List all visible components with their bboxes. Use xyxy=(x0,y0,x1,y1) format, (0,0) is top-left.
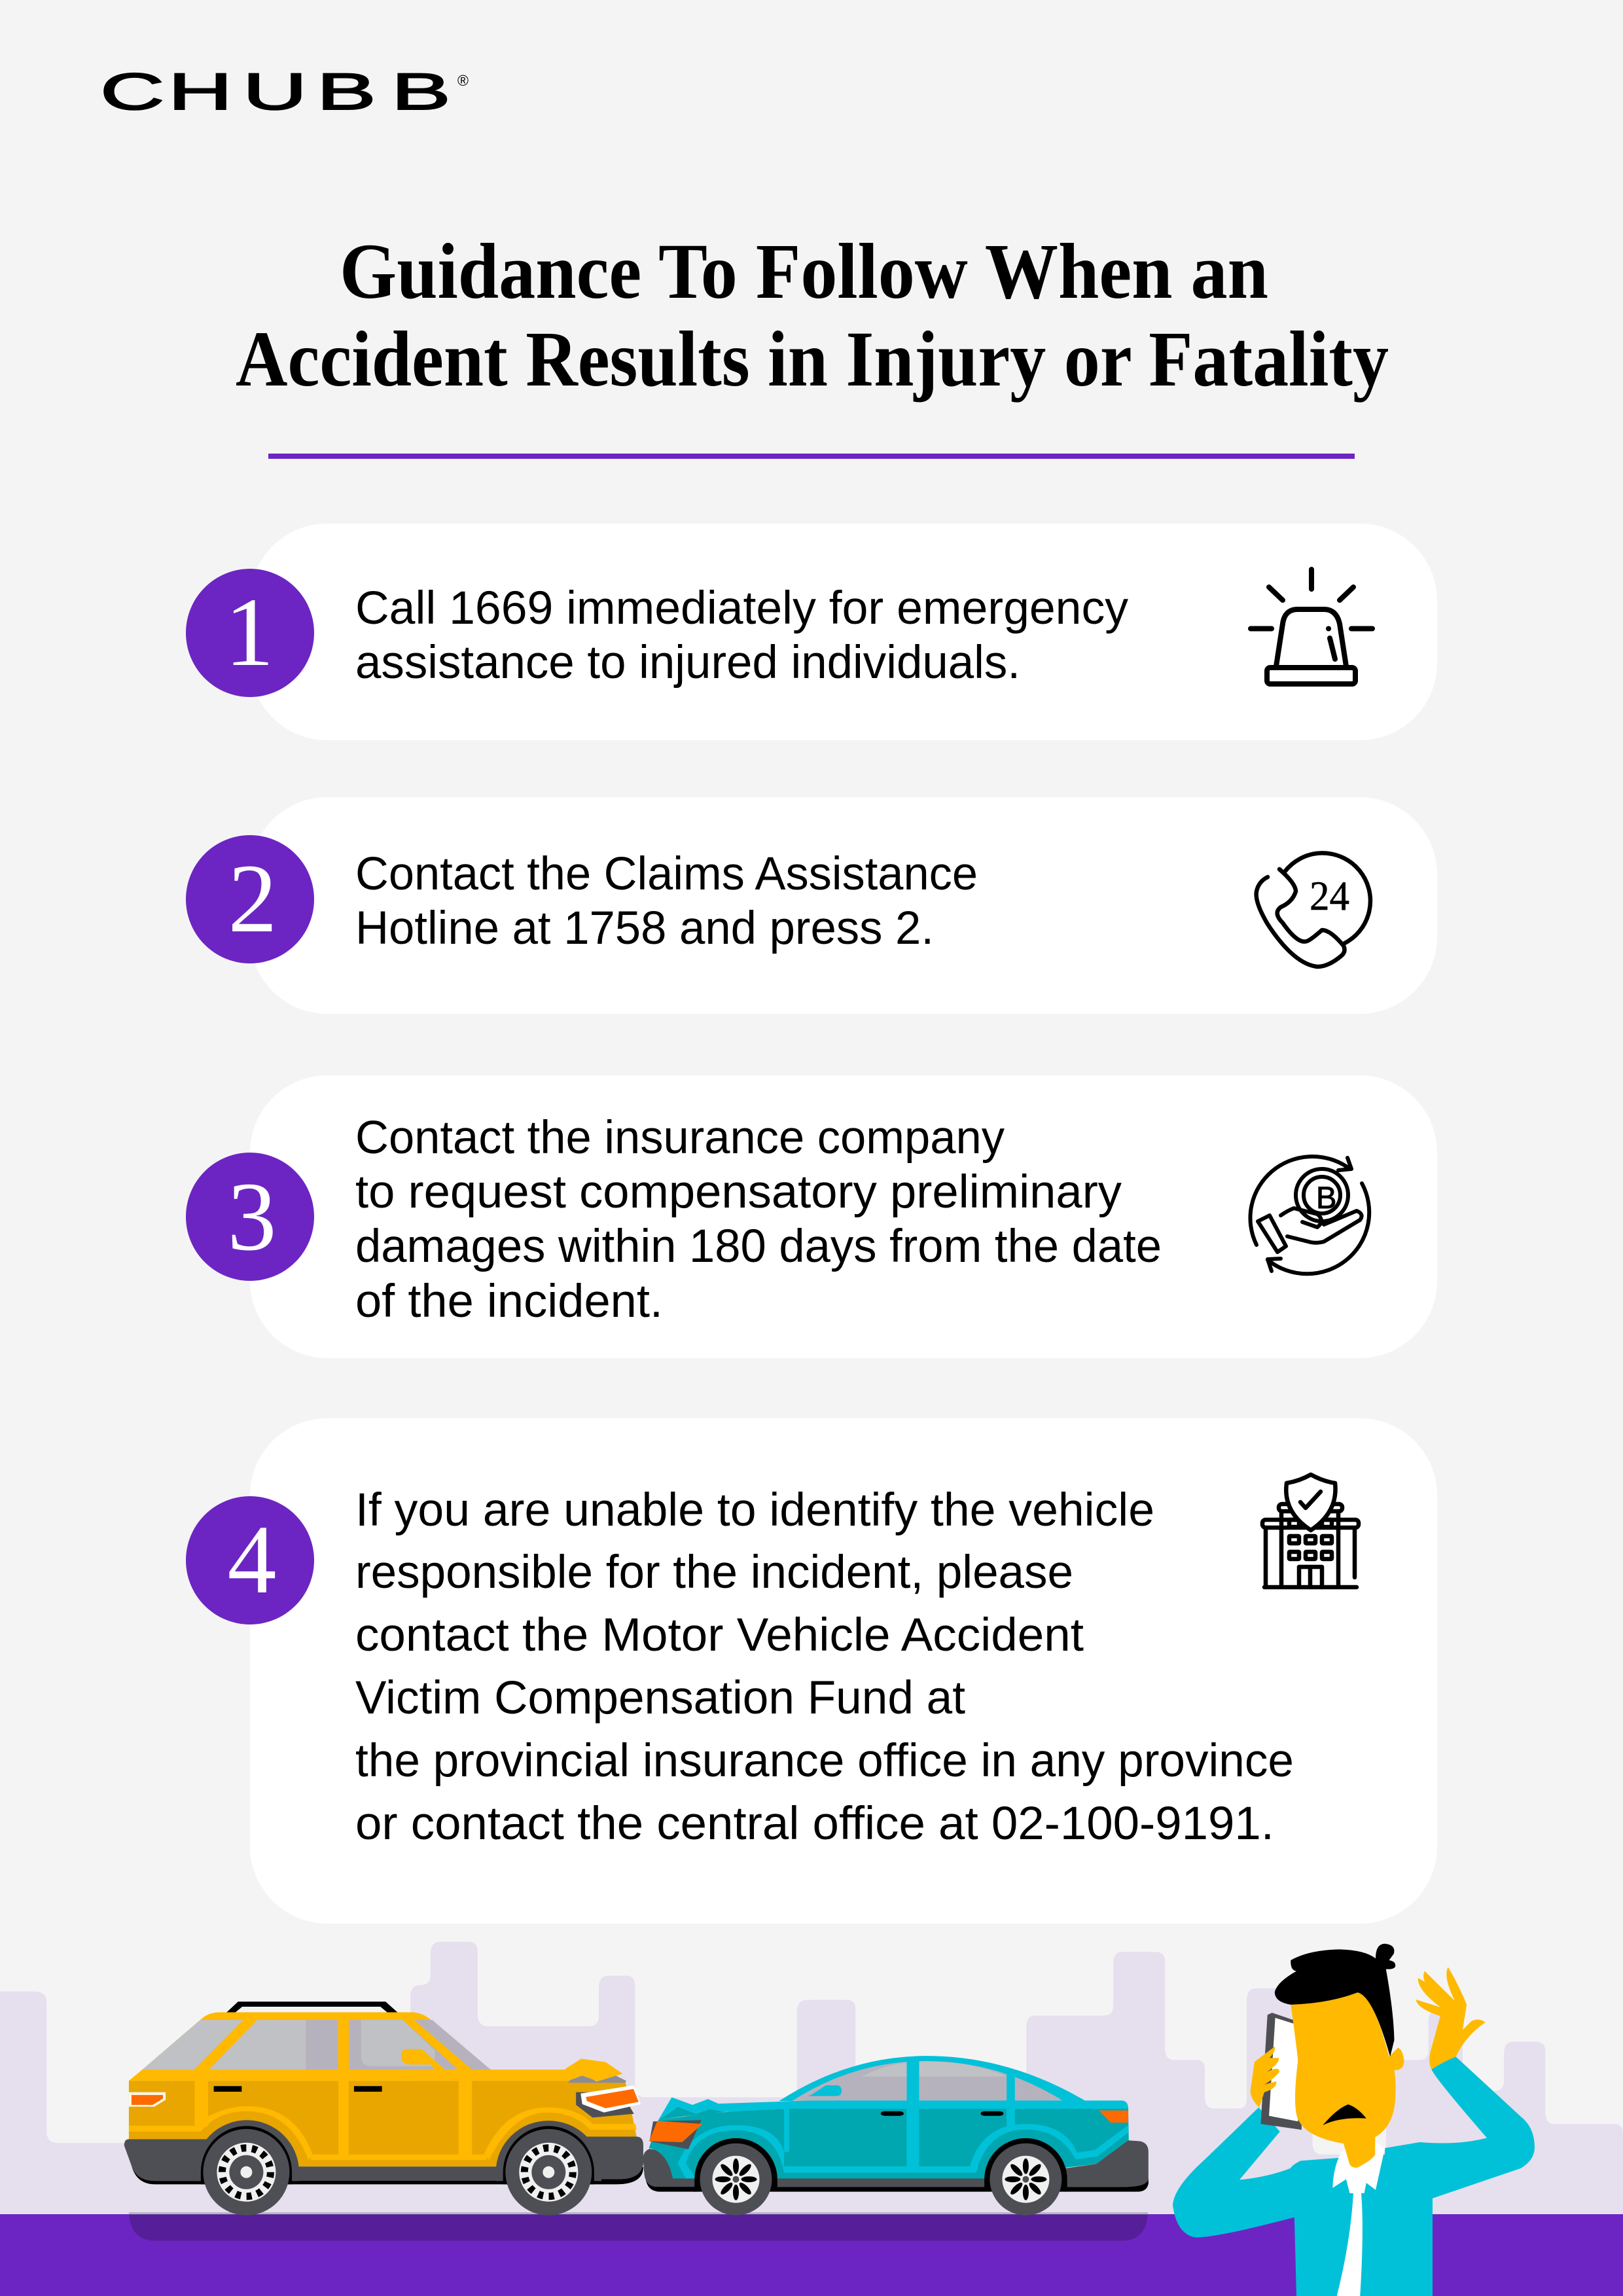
raised hand xyxy=(1416,1967,1486,2070)
title: Guidance To Follow When an xyxy=(340,228,1268,315)
panel: step 1 xyxy=(186,524,1437,740)
teal car xyxy=(643,2056,1149,2215)
step 4 text: Victim Compensation Fund at xyxy=(355,1672,965,1724)
icon: insured building with shield xyxy=(1262,1475,1359,1587)
card background xyxy=(250,797,1437,1014)
city skyline xyxy=(0,1942,1623,2215)
icon: hand holding coin with arrows xyxy=(1250,1157,1369,1274)
title: Accident Results in Injury or Fatality xyxy=(236,315,1389,403)
stressed man on phone xyxy=(1173,1944,1535,2296)
step 3 text: Contact the insurance company xyxy=(355,1112,1005,1164)
step 4 text: the provincial insurance office in any province xyxy=(355,1735,1294,1787)
step 4 text xyxy=(355,1484,1294,1850)
car shadow on road xyxy=(129,2212,1148,2240)
step 4 text: If you are unable to identify the vehicle xyxy=(355,1484,1154,1536)
teal car wheels xyxy=(700,2144,1061,2215)
number badge 1 xyxy=(186,569,314,697)
number badge 1: 1 xyxy=(225,578,274,687)
white shirt and collar xyxy=(1332,2142,1385,2296)
step 2 text xyxy=(355,848,978,954)
logo: CHUBB: ® xyxy=(457,72,469,89)
card background xyxy=(250,1075,1437,1358)
number badge 4 xyxy=(186,1496,314,1624)
card background xyxy=(250,1418,1437,1924)
step 3 text: damages within 180 days from the date xyxy=(355,1221,1162,1272)
phone xyxy=(1260,2013,1302,2130)
number badge 2 xyxy=(186,835,314,963)
step 3 text: of the incident. xyxy=(355,1276,663,1327)
illustration: accident scene xyxy=(0,1942,1623,2296)
step 2 text: Hotline at 1758 and press 2. xyxy=(355,903,934,954)
panel: step 4 xyxy=(186,1418,1437,1924)
step 3 text: to request compensatory preliminary xyxy=(355,1166,1122,1218)
number badge 3: 3 xyxy=(228,1162,276,1271)
number badge 3 xyxy=(186,1153,314,1281)
neck xyxy=(1343,2136,1375,2168)
panel: step 3 xyxy=(186,1075,1437,1358)
hand holding phone xyxy=(1251,2047,1279,2108)
yellow car xyxy=(124,2001,643,2215)
number badge 2: 2 xyxy=(228,844,277,953)
yellow car wheels xyxy=(203,2129,592,2215)
hair xyxy=(1275,1944,1395,2056)
card background xyxy=(250,524,1437,740)
step 1 text: Call 1669 immediately for emergency xyxy=(355,583,1128,634)
blue suit xyxy=(1173,2056,1535,2296)
step 1 text xyxy=(355,583,1128,689)
icon: hand holding coin with arrows: B xyxy=(1316,1180,1336,1215)
step 4 text: contact the Motor Vehicle Accident xyxy=(355,1609,1084,1661)
step 2 text: Contact the Claims Assistance xyxy=(355,848,978,900)
icon: emergency siren xyxy=(1251,569,1372,684)
step 4 text: or contact the central office at 02-100-9191. xyxy=(355,1798,1274,1850)
face xyxy=(1291,1992,1404,2144)
panel: step 2 xyxy=(186,797,1437,1014)
title xyxy=(236,228,1389,403)
step 3 text xyxy=(355,1112,1162,1327)
purple road xyxy=(0,2214,1623,2296)
icon: 24 hour phone xyxy=(1257,853,1370,967)
mouth xyxy=(1323,2104,1366,2125)
logo: CHUBB: CHUBB xyxy=(100,62,451,120)
icon: 24 hour phone: 24 xyxy=(1310,872,1349,919)
number badge 4: 4 xyxy=(228,1505,276,1614)
step 4 text: responsible for the incident, please xyxy=(355,1547,1073,1598)
step 1 text: assistance to injured individuals. xyxy=(355,637,1020,689)
